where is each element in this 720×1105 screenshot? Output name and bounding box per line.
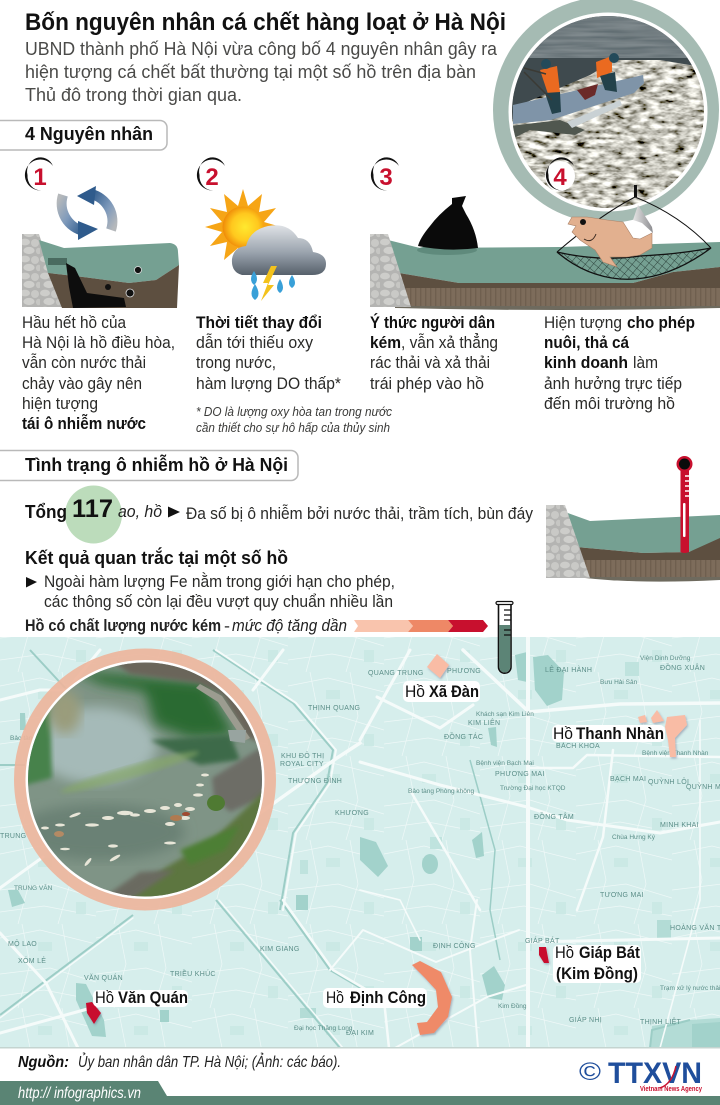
map lake: Định Công: Định Công: [350, 988, 426, 1007]
map of Hanoi lakes: TRUNG VĂN: [14, 883, 53, 892]
gradient arrow: [354, 620, 488, 632]
map of Hanoi lakes: Trường Đại học KTQD: [500, 785, 566, 792]
map lake: Giáp Bát: [539, 943, 641, 983]
map of Hanoi lakes: Bưu Hải Sản: [600, 679, 638, 686]
heading pill: Tình trạng ô nhiễm: [0, 450, 298, 480]
map of Hanoi lakes: PHƯƠNG MAI: [495, 771, 545, 778]
number badge 4: [545, 157, 575, 191]
heading pill: 4 Nguyên nhân: [0, 120, 167, 150]
cause 3 text: [370, 313, 498, 393]
map lake: Văn Quán: Hồ: [95, 988, 114, 1007]
monitoring results text: Ngoài hàm lượng Fe nằm trong giới hạn cho phép,: [44, 572, 395, 591]
footer source: [0, 1047, 720, 1105]
map of Hanoi lakes: BÁCH KHOA: [556, 741, 600, 750]
intro text: UBND thành phố Hà Nội vừa công bố 4 nguyên nhân gây ra: [25, 38, 498, 59]
map of Hanoi lakes: TRIỀU KHÚC: [170, 968, 216, 978]
cause 4 text: đến môi trường hồ: [544, 394, 675, 413]
logo: TTXVN: Vietnam News Agency: [640, 1084, 703, 1093]
map lake: Văn Quán: Văn Quán: [118, 988, 188, 1007]
cause 3 and 4 illustration: lake bank: [370, 196, 720, 310]
number badge 2: [197, 157, 225, 191]
footer source: Ủy ban nhân dân TP. Hà Nội; (Ảnh: các báo).: [78, 1052, 341, 1071]
cause 1 text: chảy vào gây nên: [22, 374, 142, 393]
map of Hanoi lakes: TƯƠNG MAI: [600, 892, 644, 899]
map lake: Định Công: Hồ: [326, 988, 344, 1007]
legend: water quality scale: mức độ tăng dần: [232, 617, 347, 635]
map lake: Thanh Nhàn: Thanh Nhàn: [576, 724, 664, 743]
footnote: [196, 405, 393, 435]
cause 3 text: , vẫn xả thẳng: [401, 333, 498, 352]
icon: fish caught in net: [557, 185, 711, 279]
map lake: Giáp Bát: (Kim Đồng): [556, 964, 638, 983]
map of Hanoi lakes: Khách sạn Kim Liên: [476, 711, 534, 718]
map of Hanoi lakes: TRUNG: [0, 833, 26, 840]
intro text: hiện tượng cá chết bất thường tại một số hồ trên địa bàn: [25, 61, 476, 82]
footer url bar: [0, 1081, 720, 1105]
icon: garbage bag: [418, 196, 478, 250]
intro text: [25, 38, 498, 105]
footer url bar: http:// infographics.vn: [18, 1085, 141, 1102]
cause 2 text: dẫn tới thiếu oxy: [196, 333, 313, 352]
map of Hanoi lakes: MINH KHAI: [660, 822, 699, 829]
cause 2 text: [196, 313, 341, 393]
map lake: Thanh Nhàn: Hồ: [553, 724, 573, 743]
fish: [568, 217, 652, 267]
map of Hanoi lakes: Đại học Thăng Long: [294, 1025, 353, 1032]
heading pill: Tình trạng ô nhiễm: Tình trạng ô nhiễm hồ ở Hà Nội: [25, 454, 288, 475]
cause 3 text: trái phép vào hồ: [370, 374, 484, 393]
map of Hanoi lakes: Bảo tàng Phòng không: [408, 788, 475, 795]
monitoring results text: các thông số còn lại đều vượt quy chuẩn nhiều lần: [44, 592, 393, 611]
cause 4 text: cho phép: [627, 313, 695, 332]
statistic: total 117 lakes: Đa số bị ô nhiễm bởi nước thải, trầm tích, bùn đáy: [186, 504, 533, 523]
map of Hanoi lakes: ĐỊNH CÔNG: [433, 941, 476, 950]
statistic: total 117 lakes: [25, 486, 533, 544]
map lake: Thanh Nhàn: [552, 710, 687, 757]
map of Hanoi lakes: THƯỢNG ĐÌNH: [288, 776, 342, 785]
logo: TTXVN: TTXVN: [608, 1057, 702, 1090]
map lake: Văn Quán: [86, 988, 188, 1024]
statistic: total 117 lakes: Tổng: [25, 502, 67, 522]
map lake: Xã Đàn: Hồ: [405, 682, 425, 701]
map of Hanoi lakes: VĂN QUÁN: [84, 973, 123, 982]
statistic: total 117 lakes: ao, hồ: [118, 502, 162, 521]
footnote: * DO là lượng oxy hòa tan trong nước: [196, 405, 393, 419]
cause 2 illustration: sun and storm cloud: [205, 189, 326, 301]
map of Hanoi lakes: GIÁP NHỊ: [569, 1015, 602, 1024]
map of Hanoi lakes: GIÁP BÁT: [525, 936, 560, 945]
logo: TTXVN: [579, 1057, 703, 1093]
heading pill: 4 Nguyên nhân: 4 Nguyên nhân: [25, 124, 153, 144]
legend: water quality scale: -: [224, 618, 230, 635]
map of Hanoi lakes: Viện Dinh Dưỡng: [640, 655, 691, 662]
cause 1 text: Hà Nội là hồ điều hòa,: [22, 333, 175, 352]
cause 4 text: Hiện tượng: [544, 313, 622, 332]
cause 4 text: nuôi, thả cá: [544, 333, 629, 352]
cause 4 text: ảnh hưởng trực tiếp: [544, 374, 682, 393]
map of Hanoi lakes: THỊNH LIỆT: [640, 1017, 682, 1026]
net: [557, 248, 711, 279]
map of Hanoi lakes: KHU ĐÔ THỊ: [281, 751, 324, 760]
monitoring results heading: Kết quả quan trắc tại một số hồ: [25, 547, 288, 568]
map of Hanoi lakes: MỘ LAO: [8, 939, 37, 948]
number badge 1: 1: [33, 164, 47, 191]
illustration: thermometer in lake: [546, 456, 720, 582]
map of Hanoi lakes: QUỲNH LÔI: [648, 777, 689, 786]
photo: polluted lake in ring: [15, 654, 270, 904]
map of Hanoi lakes: XÓM LẺ: [18, 956, 46, 965]
map of Hanoi lakes: KIM LIÊN: [468, 718, 500, 727]
cause 4 text: [544, 313, 695, 413]
map of Hanoi lakes: Kim Đồng: [498, 1001, 527, 1010]
map lake: Giáp Bát: Giáp Bát: [579, 943, 640, 962]
cause 3 text: rác thải và xả thải: [370, 353, 490, 372]
monitoring results text: [26, 572, 395, 611]
map of Hanoi lakes: [0, 637, 720, 1048]
map of Hanoi lakes: THỊNH QUANG: [308, 705, 360, 712]
cause 3 text: Ý thức người dân: [370, 313, 495, 332]
map lake: Xã Đàn: Xã Đàn: [429, 682, 479, 701]
map of Hanoi lakes: LÊ ĐẠI HÀNH: [545, 665, 592, 674]
cause 4 text: kinh doanh: [544, 353, 628, 372]
number badge 1: [25, 157, 53, 191]
map lake: Giáp Bát: Hồ: [555, 943, 574, 962]
number badge 3: [371, 157, 399, 191]
icon: recycle arrows: [62, 186, 112, 240]
photo: dead fish on lake in ring: [493, 0, 719, 223]
map of Hanoi lakes: KHƯƠNG: [335, 810, 369, 817]
cause 4 text: làm: [633, 353, 658, 372]
map of Hanoi lakes: KIM GIANG: [260, 946, 300, 953]
intro text: Thủ đô trong thời gian qua.: [25, 84, 242, 105]
map of Hanoi lakes: BẠCH MAI: [610, 776, 646, 783]
legend: water quality scale: [25, 617, 488, 635]
title: Bốn nguyên nhân cá chết hàng loạt ở Hà Nội: [25, 9, 506, 36]
cause 1 text: [22, 313, 175, 433]
map of Hanoi lakes: PHƯƠNG: [447, 668, 481, 675]
map lake: Xã Đàn: [403, 654, 480, 702]
map lake: Định Công: [323, 961, 452, 1035]
map of Hanoi lakes: ROYAL CITY: [280, 761, 324, 768]
map of Hanoi lakes: Bệnh viện Bạch Mai: [476, 760, 534, 767]
number badge 3: 3: [379, 164, 393, 191]
cause 2 text: Thời tiết thay đổi: [196, 313, 322, 332]
cause 3 text: kém: [370, 333, 401, 352]
map of Hanoi lakes: Chùa Hưng Ký: [612, 834, 656, 841]
footer source: Nguồn:: [18, 1054, 69, 1071]
number badge 2: 2: [205, 164, 219, 191]
map of Hanoi lakes: QUANG TRUNG: [368, 670, 424, 677]
map of Hanoi lakes: Trạm xử lý nước thải: [660, 984, 720, 992]
map of Hanoi lakes: ĐỒNG TÁC: [444, 731, 483, 741]
cause 1 illustration: [22, 186, 179, 308]
number badge 4: 4: [553, 164, 567, 191]
cause 1 text: vẫn còn nước thải: [22, 353, 146, 372]
green circle: [65, 486, 122, 544]
cause 2 text: trong nước,: [196, 353, 276, 372]
map of Hanoi lakes: ĐẠI KIM: [346, 1030, 374, 1037]
map of Hanoi lakes: Bảo tàng Thành phố: [10, 733, 69, 742]
logo: TTXVN: ©: [579, 1058, 602, 1086]
map of Hanoi lakes: Bệnh viện Thanh Nhàn: [642, 750, 709, 757]
legend: water quality scale: Hồ có chất lượng nước kém: [25, 617, 221, 635]
cause 1 text: Hầu hết hồ của: [22, 313, 126, 332]
map of Hanoi lakes: ĐỒNG TÂM: [534, 811, 574, 821]
test tube icon: [496, 602, 513, 673]
cause 1 text: hiện tượng: [22, 394, 98, 413]
cause 2 text: hàm lượng DO thấp*: [196, 374, 341, 393]
statistic: total 117 lakes: 117: [72, 495, 113, 523]
footnote: cần thiết cho sự hô hấp của thủy sinh: [196, 421, 390, 435]
cause 1 text: tái ô nhiễm nước: [22, 414, 146, 433]
map of Hanoi lakes: ĐỒNG XUÂN: [660, 662, 705, 672]
